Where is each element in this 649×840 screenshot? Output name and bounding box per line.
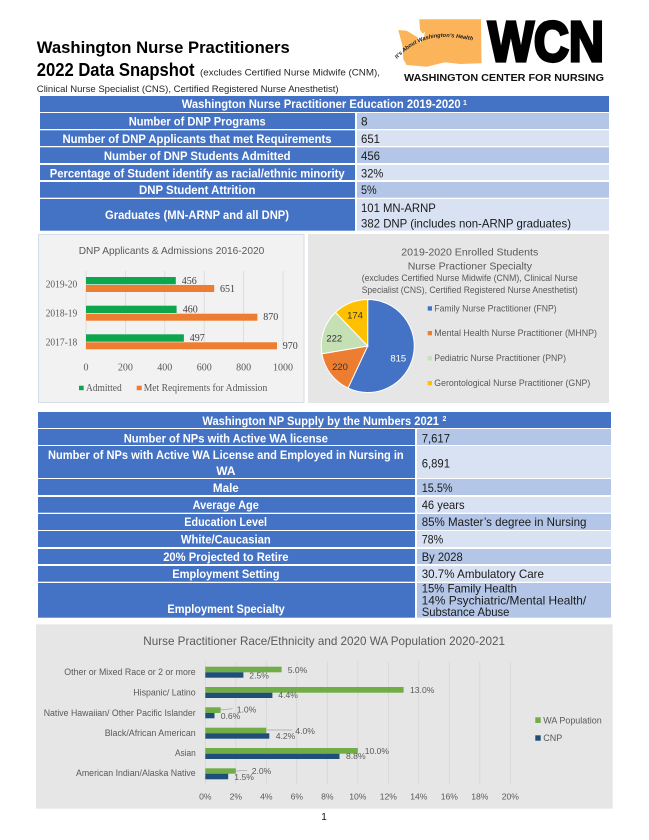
data labels: 10.0% [365,746,389,756]
row: employment specialty: 14% Psychiatric/Mental Health/ [422,593,587,607]
row: education level: Education Level [184,515,267,529]
panel: DNP applicants and admissions bar chart [38,234,304,402]
row: minority percentage: 32% [361,166,384,180]
row: employment setting: Employment Setting [172,567,280,581]
row: students admitted [40,147,609,163]
data labels [221,665,435,782]
logo: Washington Center for Nursing [394,10,604,84]
category labels: Black/African American [105,728,196,738]
legend: Admitted [86,383,122,394]
legend [428,304,597,388]
pie labels: 815 [390,354,406,365]
x axis labels: 18% [471,792,489,802]
panel: enrolled students pie chart [308,234,609,403]
legend: Pediatric Nurse Practitioner (PNP) [434,353,566,363]
x axis labels: 4% [260,792,273,802]
row: DNP programs: Number of DNP Programs [129,114,266,128]
row: employment setting: 30.7% Ambulatory Care [422,567,544,581]
year labels: 2017-18 [46,338,77,348]
data labels: 970 [283,341,298,352]
row: projected to retire: 20% Projected to Retire [163,550,289,564]
pie labels: 220 [332,362,348,373]
table header: supply: 2 [442,416,446,423]
pie labels: 222 [326,334,342,345]
row: average age: 46 years [422,498,465,512]
row: projected to retire: By 2028 [422,550,463,564]
legend: CNP [543,733,562,743]
pie labels [326,310,406,373]
data labels: 651 [220,284,235,295]
row: employment specialty [38,581,611,619]
row: DNP applicants: 651 [361,132,380,146]
row: active licenses: 7,617 [422,431,450,445]
row: students admitted: 456 [361,149,380,163]
year labels: 2019-20 [46,280,77,290]
row: education level [38,514,611,530]
row: graduates [40,199,609,231]
x axis labels: 6% [291,792,303,802]
legend: Met Reqirements for Admission [144,383,267,394]
legend: Gerontological Nurse Practitioner (GNP) [434,378,590,388]
row: white/caucasian: White/Caucasian [181,533,271,547]
row: male: Male [213,481,239,495]
data labels: 0.6% [221,711,241,721]
row: DNP applicants: Number of DNP Applicants that met Requirements [62,132,332,146]
row: employed in nursing: 6,891 [422,456,450,470]
row: average age [38,497,611,513]
data labels: 460 [183,305,198,316]
data labels: 2.5% [249,670,269,680]
category labels [44,667,196,778]
row: DNP programs [40,113,609,129]
data labels: 4.4% [278,690,298,700]
chart title: (excludes Certified Nurse Midwife (CNM), Clinical Nurse [362,273,578,283]
logo: Washington Center for Nursing: WCN [488,10,604,74]
x axis labels: 10% [349,792,367,802]
row: attrition: DNP Student Attrition [139,183,255,197]
row: employment specialty: Employment Specialty [167,602,285,616]
legend [535,715,602,743]
logo: Washington Center for Nursing: It's About Washington's Health [394,33,473,59]
title block [37,38,380,95]
table header: education [40,96,609,112]
chart title: 2019-2020 Enrolled Students [401,246,538,258]
data labels [182,276,298,352]
row: employment setting [38,566,611,582]
category labels: Asian [175,748,196,758]
row: active licenses [38,429,611,445]
x axis labels [199,792,519,802]
x axis labels: 0 [84,362,88,374]
x axis labels: 800 [236,362,251,374]
table header: supply: Washington NP Supply by the Numbers 2021 [202,414,439,428]
data labels: 1.5% [234,772,254,782]
x axis labels: 200 [118,362,133,374]
x axis labels: 20% [502,792,519,802]
chart title: Specialist (CNS), Certified Registered Nurse Anesthetist) [362,285,578,295]
data labels: 456 [182,276,197,287]
row: students admitted: Number of DNP Students Admitted [104,149,291,163]
x axis labels: 16% [441,792,458,802]
chart title: Nurse Practitioner Race/Ethnicity and 2020 WA Population 2020-2021 [143,634,505,648]
pie labels: 174 [347,310,363,321]
x axis labels: 12% [380,792,397,802]
row: graduates: 382 DNP (includes non-ARNP graduates) [361,216,571,230]
table header: education: 1 [463,100,467,107]
row: education level: 85% Master’s degree in Nursing [422,515,586,529]
data labels: 8.8% [346,751,366,761]
row: average age: Average Age [193,498,259,512]
page number: 1 [321,812,327,823]
title block: Clinical Nurse Specialist (CNS), Certified Registered Nurse Anesthetist) [37,84,339,95]
table header: supply [38,412,611,428]
year labels [46,280,77,348]
row: graduates: Graduates (MN-ARNP and all DNP) [105,208,289,222]
legend: Family Nurse Practitioner (FNP) [434,304,557,314]
row: attrition [40,182,609,198]
row: minority percentage: Percentage of Student identify as racial/ethnic minority [50,166,345,180]
x axis labels: 0% [199,792,212,802]
row: attrition: 5% [361,183,377,197]
x axis labels: 600 [197,362,212,374]
title block: 2022 Data Snapshot [37,60,195,80]
year labels: 2018-19 [46,308,77,320]
row: employed in nursing: WA [216,464,236,478]
row: graduates: 101 MN-ARNP [361,201,436,215]
table header: education: Washington Nurse Practitioner Education 2019-2020 [182,97,461,111]
panel: race/ethnicity bar chart [36,624,613,809]
data labels: 5.0% [288,665,308,675]
category labels: Hispanic/ Latino [133,688,196,698]
row: white/caucasian [38,531,611,547]
x axis labels: 400 [157,362,172,374]
category labels: American Indian/Alaska Native [76,768,196,778]
legend: Mental Health Nurse Practitioner (MHNP) [434,328,597,338]
row: employment specialty: 15% Family Health [422,581,517,595]
pie slices [321,299,414,392]
title block: (excludes Certified Nurse Midwife (CNM), [200,68,380,78]
legend: WA Population [543,715,602,725]
data labels: 2.0% [252,766,272,776]
row: active licenses: Number of NPs with Active WA license [124,431,328,445]
row: male [38,479,611,495]
category labels: Native Hawaiian/ Other Pacific Islander [44,708,196,718]
bars: admitted and met requirements [86,271,283,349]
row: DNP applicants [40,130,609,146]
row: male: 15.5% [422,481,453,495]
row: projected to retire [38,549,611,564]
x axis labels: 14% [410,792,428,802]
chart title: DNP Applicants & Admissions 2016-2020 [79,245,264,257]
bars: WA population and CNP [205,662,510,784]
table: Nurse Practitioner Education [40,96,609,231]
x axis labels: 8% [321,792,334,802]
table: NP Supply by the Numbers [38,412,611,619]
chart title: Nurse Practioner Specialty [408,260,533,272]
row: DNP programs: 8 [361,114,368,128]
x axis labels: 1000 [273,362,293,374]
data labels: 13.0% [410,685,435,695]
data labels: 1.0% [237,704,257,714]
logo: Washington Center for Nursing: WASHINGTON CENTER FOR NURSING [404,72,604,84]
row: white/caucasian: 78% [422,533,444,547]
row: employment specialty: Substance Abuse [422,605,510,619]
row: minority percentage [40,165,609,180]
legend [79,383,267,394]
title block: Washington Nurse Practitioners [37,38,290,57]
data labels: 870 [263,312,278,323]
leader lines [220,709,292,771]
row: employed in nursing: Number of NPs with Active WA License and Employed in Nursing in [48,448,404,462]
category labels: Other or Mixed Race or 2 or more [64,667,196,677]
x axis labels: 2% [230,792,242,802]
data labels: 4.0% [295,726,315,736]
data labels: 4.2% [276,731,296,741]
data labels: 497 [190,333,205,344]
row: employed in nursing [38,446,611,478]
x axis labels [84,362,293,374]
chart title [362,246,578,295]
